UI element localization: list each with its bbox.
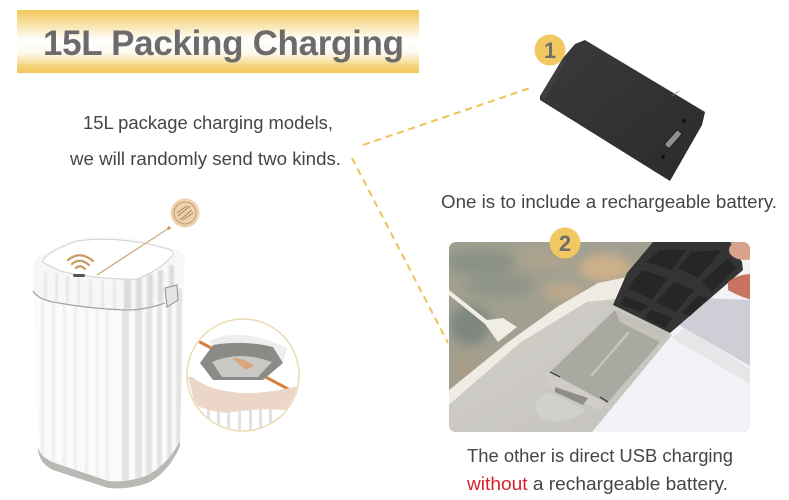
usb cable (449, 290, 517, 342)
side latch (165, 285, 178, 307)
dashed connector to battery (363, 87, 533, 145)
lid collar (33, 237, 185, 310)
wifi arcs (68, 255, 93, 269)
lid seam (33, 291, 165, 310)
title banner: 15L Packing Charging (43, 24, 404, 63)
number badge 2 (550, 228, 580, 258)
intro text: 15L package charging models, (83, 113, 333, 133)
sensor icon badge (170, 198, 200, 228)
sensor window (73, 274, 85, 277)
number badge 1 (534, 34, 566, 66)
caption: usb option (466, 446, 733, 494)
lid top (42, 239, 173, 279)
black lid (613, 242, 743, 333)
inset circle: bag holder (187, 319, 299, 433)
number badge 1: 1 (544, 38, 556, 63)
sensor callout line (97, 228, 169, 275)
battery photo (540, 40, 705, 181)
right white surface (590, 250, 750, 432)
trash bin (33, 237, 185, 500)
title banner (17, 10, 419, 73)
caption: usb option: The other is direct USB charging (467, 446, 733, 466)
tray floor (449, 298, 672, 432)
caption: usb option: without a rechargeable battery. (466, 474, 728, 494)
base (38, 438, 180, 488)
caption: battery option: One is to include a rechargeable battery. (441, 192, 777, 212)
tray rim (449, 277, 627, 405)
fingers (729, 242, 750, 260)
compartment (550, 310, 668, 403)
intro text: we will randomly send two kinds. (69, 149, 341, 169)
thumb recess (535, 392, 586, 422)
dashed connector to usb photo (352, 158, 448, 343)
body (33, 280, 184, 481)
usb compartment photo (445, 240, 761, 432)
intro text (69, 113, 341, 169)
ribs (41, 288, 182, 500)
sensor callout dot (167, 226, 171, 230)
number badge 2: 2 (559, 231, 571, 256)
